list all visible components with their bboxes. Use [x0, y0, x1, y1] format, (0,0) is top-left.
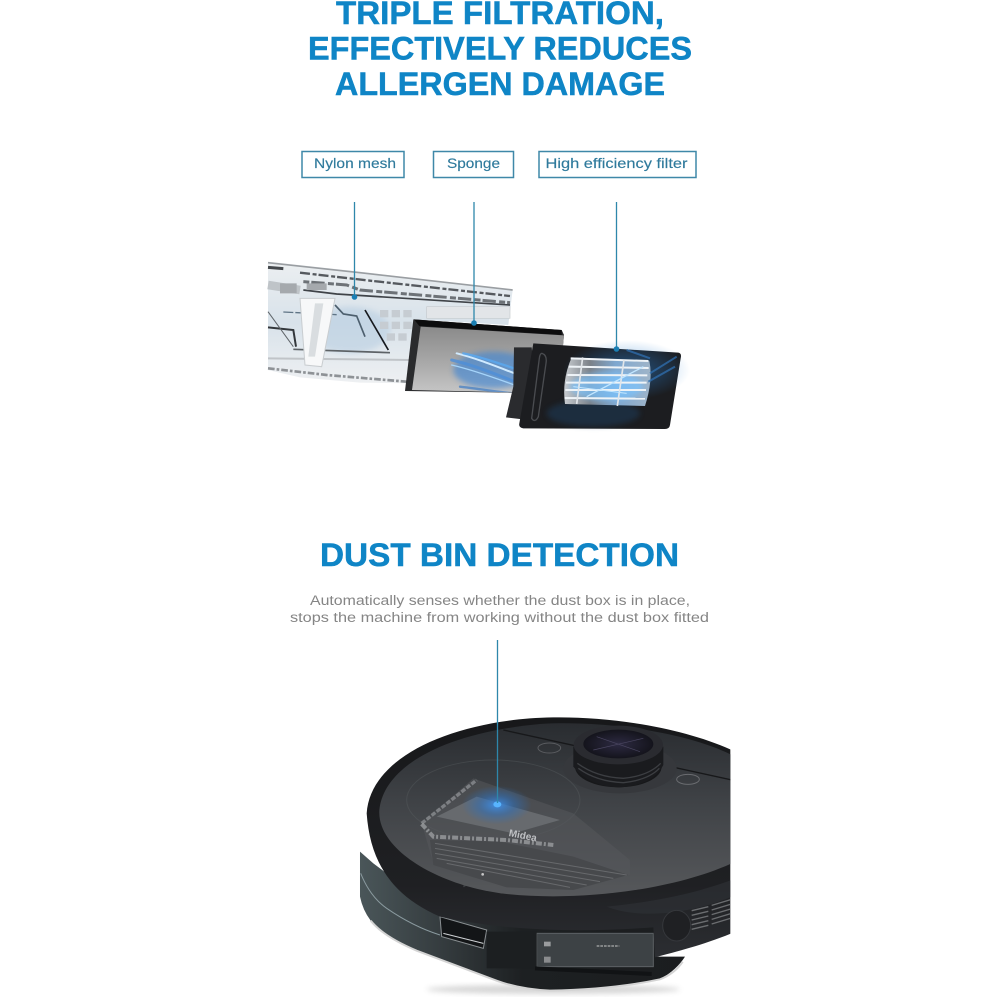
main body ring: [367, 717, 732, 957]
translucent lid: [379, 723, 732, 896]
callout line: dust box sensor: [496, 640, 498, 803]
dust box inside: Midea: [508, 828, 538, 844]
lidar tower: [573, 726, 677, 788]
floor shadow: [427, 985, 680, 994]
callout line: nylon mesh: [352, 202, 357, 300]
dust box inside: [422, 778, 630, 890]
description text: Automatically senses whether the dust box is in place,: [310, 593, 690, 608]
filter assembly illustration: [268, 262, 690, 429]
robot vacuum illustration: [360, 717, 732, 994]
blue sensor glow: [464, 787, 529, 822]
callout line: sponge: [471, 202, 477, 326]
label: high efficiency filter: High efficiency filter: [546, 155, 688, 171]
label: nylon mesh: Nylon mesh: [314, 155, 396, 171]
translucent front bumper: [360, 852, 685, 991]
side sensor and vents: [663, 899, 732, 941]
label: sponge: Sponge: [447, 155, 500, 171]
label: sponge: [434, 152, 514, 178]
title: triple filtration: EFFECTIVELY REDUCES: [308, 30, 692, 66]
heading: dust bin detection: DUST BIN DETECTION: [320, 537, 679, 573]
title: triple filtration: ALLERGEN DAMAGE: [335, 66, 665, 102]
callout line: high efficiency filter: [614, 202, 619, 352]
high efficiency filter: [506, 340, 690, 429]
label: nylon mesh: [302, 152, 404, 178]
description text: [290, 593, 709, 625]
sponge filter: [405, 319, 564, 393]
clear housing: nylon mesh: [268, 262, 513, 383]
description text: stops the machine from working without the dust box fitted: [290, 610, 709, 625]
label: high efficiency filter: [539, 152, 696, 178]
title: triple filtration: [308, 0, 692, 102]
